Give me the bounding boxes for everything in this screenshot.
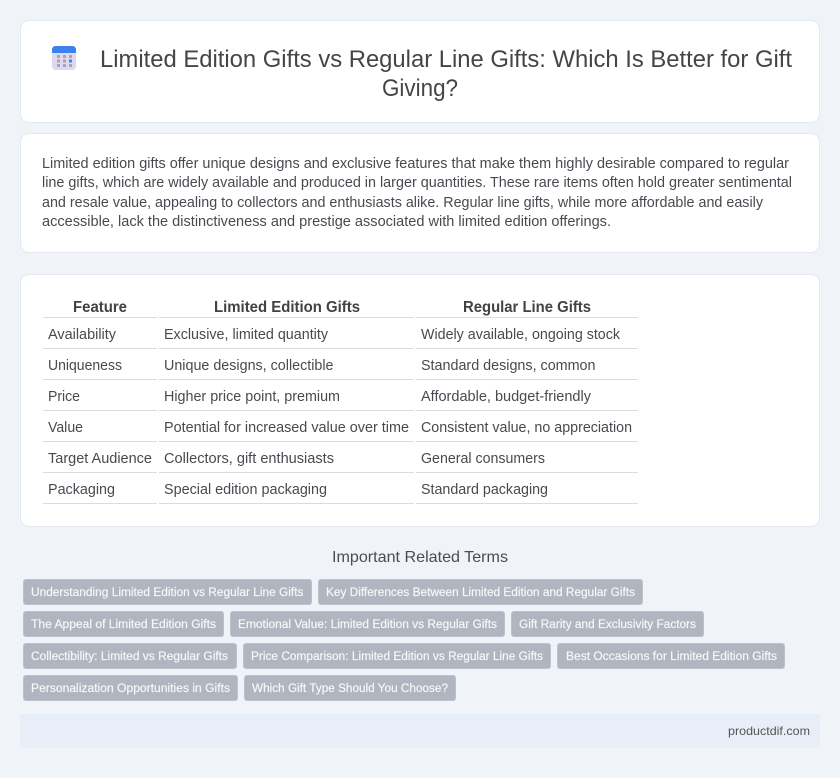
- text block: introduction: Limited edition gifts offer unique designs and exclusive features that make them highly desirable compared to regular: [42, 156, 789, 172]
- row: uniqueness: Unique designs, collectible: [164, 358, 334, 374]
- row: availability: [48, 327, 621, 343]
- row: price: Higher price point, premium: [164, 389, 340, 405]
- row: target audience: General consumers: [421, 451, 545, 467]
- row: target audience: Collectors, gift enthusiasts: [164, 451, 334, 467]
- row: packaging: Packaging: [48, 482, 115, 498]
- row: packaging: Standard packaging: [421, 482, 548, 498]
- related terms tags: [24, 580, 784, 700]
- tag: Understanding Limited Edition vs Regular Line Gifts: [31, 585, 304, 599]
- tag: Emotional Value: Limited Edition vs Regular Gifts: [238, 617, 497, 631]
- tag: Which Gift Type Should You Choose?: [252, 681, 448, 695]
- tag: The Appeal of Limited Edition Gifts: [31, 617, 216, 631]
- tag: [230, 612, 504, 636]
- tag: [512, 612, 704, 636]
- tag: Collectibility: Limited vs Regular Gifts: [31, 649, 228, 663]
- title: Giving?: [382, 75, 458, 102]
- footer: productdif.com: [728, 724, 810, 738]
- tag: Personalization Opportunities in Gifts: [31, 681, 230, 695]
- panel: introduction: [20, 134, 820, 252]
- table header: Regular Line Gifts: [463, 299, 591, 316]
- tag: Best Occasions for Limited Edition Gifts: [566, 649, 777, 663]
- tag: [24, 612, 224, 636]
- tag: Price Comparison: Limited Edition vs Regular Line Gifts: [251, 649, 543, 663]
- tag: Gift Rarity and Exclusivity Factors: [519, 617, 696, 631]
- row: uniqueness: [48, 358, 596, 374]
- row: packaging: Special edition packaging: [164, 482, 327, 498]
- tag: [24, 580, 312, 604]
- row: price: Price: [48, 389, 80, 405]
- table header: [73, 299, 591, 316]
- text block: introduction: line gifts, which are widely available and produced in larger quantities. These rare items often hold greater sentimental: [42, 175, 792, 191]
- panel: header: [20, 20, 820, 122]
- table header: Feature: [73, 299, 127, 316]
- row: target audience: Target Audience: [48, 451, 152, 467]
- row: availability: Widely available, ongoing stock: [421, 327, 621, 343]
- row: availability: Availability: [48, 327, 117, 343]
- icon: calendar: [52, 46, 76, 70]
- row: availability: Exclusive, limited quantity: [164, 327, 329, 343]
- row: price: Affordable, budget-friendly: [421, 389, 592, 405]
- tag: [318, 580, 642, 604]
- heading: important related terms: Important Related Terms: [332, 549, 508, 566]
- row: value: [48, 420, 632, 436]
- title: Limited Edition Gifts vs Regular Line Gifts: Which Is Better for Gift: [100, 46, 792, 73]
- row: value: Value: [48, 420, 83, 436]
- tag: [244, 676, 456, 700]
- row: uniqueness: Uniqueness: [48, 358, 122, 374]
- row: packaging: [48, 482, 548, 498]
- row: value: Potential for increased value over time: [164, 420, 409, 436]
- table header: Limited Edition Gifts: [214, 299, 360, 316]
- tag: [24, 676, 238, 700]
- tag: [24, 644, 236, 668]
- tag: [244, 644, 550, 668]
- footer: [20, 714, 820, 748]
- panel: comparison table: [20, 274, 820, 526]
- row: target audience: [48, 451, 545, 467]
- text block: introduction: and resale value, appealing to collectors and enthusiasts alike. Regular line gifts, while more affordable and easily: [42, 195, 764, 211]
- tag: Key Differences Between Limited Edition and Regular Gifts: [326, 585, 635, 599]
- text block: introduction: accessible, lack the distinctiveness and prestige associated with limited edition offerings.: [42, 214, 611, 230]
- row: price: [48, 389, 592, 405]
- row: value: Consistent value, no appreciation: [421, 420, 632, 436]
- tag: [558, 644, 784, 668]
- row: uniqueness: Standard designs, common: [421, 358, 596, 374]
